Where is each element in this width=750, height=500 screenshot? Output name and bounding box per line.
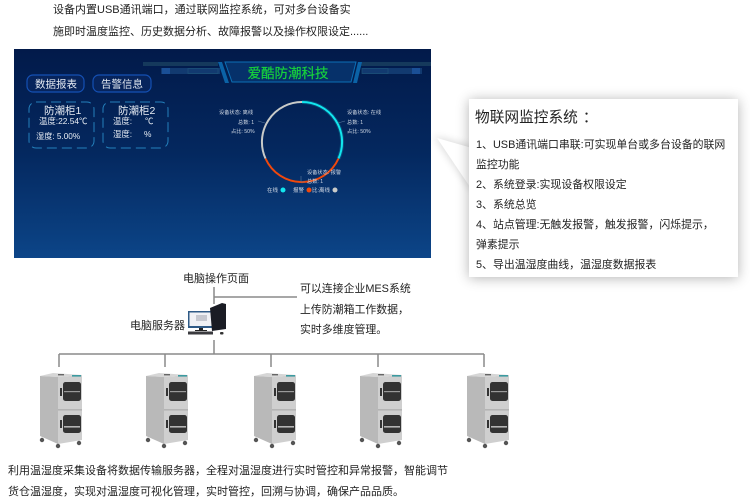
chart legend: 比:离线 bbox=[312, 186, 331, 194]
bottom description: 利用温湿度采集设备将数据传输服务器，全程对温湿度进行实时管控和异常报警，智能调节 bbox=[8, 465, 448, 477]
ring label: alarm: 总数: 1 bbox=[307, 177, 323, 185]
feature list: 2、系统登录:实现设备权限设定 bbox=[476, 179, 627, 191]
panel heading: 物联网监控系统 ： bbox=[475, 110, 598, 126]
feature list: 1、USB通讯端口串联:可实现单台或多台设备的联网 bbox=[476, 139, 725, 151]
bottom description bbox=[8, 464, 448, 498]
ring label: offline: 总数: 1 bbox=[238, 118, 254, 126]
feature list: 弹素提示 bbox=[476, 239, 520, 251]
chart legend bbox=[267, 186, 338, 194]
card: cabinet 2 bbox=[103, 102, 168, 148]
ring label: offline bbox=[219, 108, 255, 135]
button: data report: 数据报表 bbox=[35, 78, 77, 90]
feature list: 4、站点管理:无触发报警，触发报警，闪烁提示， bbox=[476, 219, 714, 231]
ring label: alarm: 设备状态: 报警 bbox=[307, 168, 341, 176]
card: cabinet 2: 防潮柜2 bbox=[118, 104, 155, 117]
card: cabinet 1: 温度:22.54℃ bbox=[39, 116, 88, 126]
button: alarm info: 告警信息 bbox=[101, 78, 143, 90]
feature list: 监控功能 bbox=[476, 159, 520, 171]
dashboard header: 爱酷防潮科技 bbox=[248, 66, 329, 81]
intro text: 设备内置USB通讯端口，通过联网监控系统，可对多台设备实 bbox=[53, 4, 351, 16]
card: cabinet 2: ℃ bbox=[145, 116, 154, 126]
intro text: 施即时温度监控、历史数据分析、故障报警以及操作权限设定...... bbox=[53, 26, 368, 38]
cabinet 2 bbox=[146, 373, 188, 448]
ring label: online bbox=[347, 108, 381, 135]
cabinet 3 bbox=[254, 373, 296, 448]
cabinet 5 bbox=[467, 373, 509, 448]
ring label: offline: 占比: 50% bbox=[231, 127, 255, 135]
ring label: online: 设备状态: 在线 bbox=[347, 108, 381, 116]
text: MES note: 可以连接企业MES系统 bbox=[300, 283, 411, 295]
ring label: online: 占比: 50% bbox=[347, 127, 371, 135]
ring label: online: 总数: 1 bbox=[347, 118, 363, 126]
text: MES note: 上传防潮箱工作数据， bbox=[300, 304, 409, 316]
button: alarm info bbox=[93, 75, 151, 92]
label: PC operation page: 电脑操作页面 bbox=[183, 273, 249, 285]
feature list bbox=[476, 138, 725, 271]
callout pointer bbox=[436, 136, 469, 188]
card: cabinet 2: % bbox=[144, 129, 152, 139]
card: cabinet 1: 湿度: 5.00% bbox=[36, 131, 80, 141]
bottom description: 货仓温湿度，实现对温湿度可视化管理，实时管控，回溯与协调，确保产品品质。 bbox=[8, 486, 404, 498]
dashboard header bbox=[143, 62, 431, 83]
chart legend: 在线 bbox=[267, 186, 279, 194]
label: PC server: 电脑服务器 bbox=[130, 320, 185, 332]
cabinet 1 bbox=[40, 373, 82, 448]
text: MES note bbox=[300, 282, 411, 336]
card: cabinet 2: 温度: bbox=[113, 116, 132, 126]
intro text bbox=[53, 4, 368, 38]
feature list: 3、系统总览 bbox=[476, 199, 537, 211]
ring chart bbox=[258, 102, 345, 182]
ring label: alarm bbox=[307, 168, 341, 185]
button: data report bbox=[27, 75, 84, 92]
feature list: 5、导出温湿度曲线，温湿度数据报表 bbox=[476, 259, 656, 271]
ring label: offline: 设备状态: 离线 bbox=[219, 108, 253, 116]
cabinet 4 bbox=[360, 373, 402, 448]
card: cabinet 1 bbox=[29, 102, 94, 148]
card: cabinet 1: 防潮柜1 bbox=[44, 104, 81, 117]
text: MES note: 实时多维度管理。 bbox=[300, 324, 387, 336]
chart legend: 报警 bbox=[293, 186, 305, 194]
panel: monitoring dashboard bbox=[14, 49, 431, 258]
panel: IoT monitoring system bbox=[469, 99, 738, 277]
card: cabinet 2: 湿度: bbox=[113, 129, 132, 139]
